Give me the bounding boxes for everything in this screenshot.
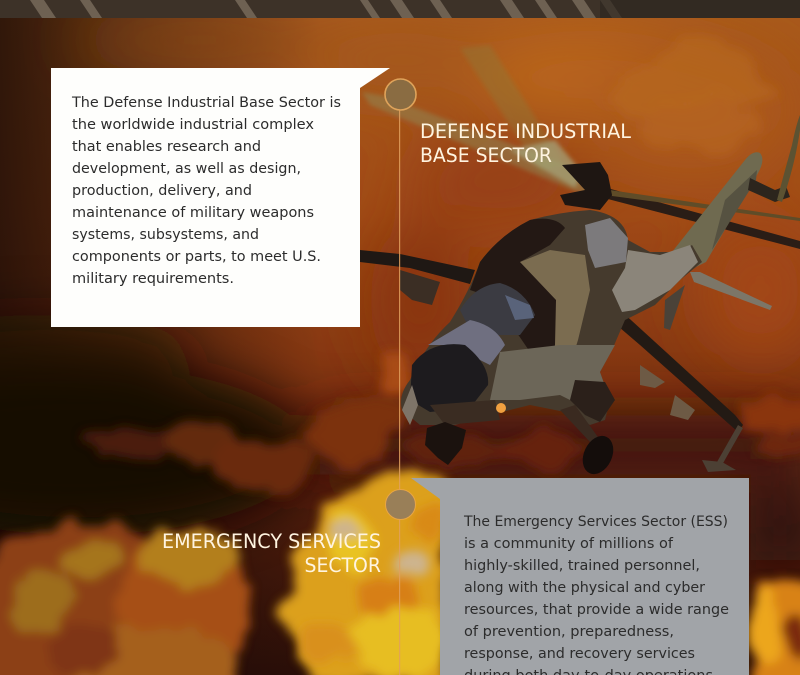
text: defense description: production, delivery, and (72, 183, 252, 199)
canopy (460, 283, 535, 335)
tail fin (690, 272, 772, 310)
heading: defense industrial base sector: BASE SECTOR (420, 144, 552, 167)
left explosion (0, 525, 250, 675)
rotor hub (560, 162, 612, 210)
dark brown clouds (85, 350, 800, 493)
text: defense description: the worldwide industrial complex (72, 117, 314, 133)
text: defense description: The Defense Industrial Base Sector is (71, 95, 341, 111)
right stub wing (605, 310, 743, 432)
top textured strip (0, 0, 800, 18)
fuselage (401, 210, 702, 425)
text: emergency description: of prevention, preparedness, (464, 624, 674, 640)
marker: defense sector (385, 79, 416, 110)
text: emergency description: along with the physical and cyber (464, 580, 705, 596)
panel: defense industrial base description (51, 68, 390, 327)
lower dark band (0, 315, 800, 560)
text: emergency description: response, and recovery services (464, 646, 695, 662)
text: defense description: that enables research and (72, 139, 261, 155)
panel: emergency services description (411, 478, 749, 675)
text: defense description: components or parts, to meet U.S. (72, 249, 321, 265)
right explosion (753, 580, 800, 675)
tail rotor (748, 178, 790, 202)
text: emergency description: highly-skilled, trained personnel, (464, 558, 700, 574)
text: defense description: maintenance of military weapons (72, 205, 314, 221)
grey engine (585, 218, 628, 268)
main rotor motion blur (362, 45, 600, 195)
marker: emergency sector (386, 490, 416, 520)
billowing cumulus (620, 40, 770, 150)
text: defense description: military requirements. (72, 271, 234, 287)
text: emergency description (463, 514, 729, 675)
left stub wing (360, 250, 475, 284)
text: defense description (71, 95, 341, 287)
heading: emergency services sector (162, 530, 381, 577)
text: defense description: development, as well as design, (72, 161, 301, 177)
left dark vignette (0, 18, 294, 564)
grey rear fuselage (612, 245, 698, 312)
text: emergency description: The Emergency Services Sector (ESS) (463, 514, 728, 530)
heading: defense industrial base sector (420, 120, 631, 167)
muzzle flash (496, 403, 506, 413)
lower body (490, 345, 615, 410)
tail boom (672, 152, 762, 270)
text: emergency description: is a community of millions of (464, 536, 674, 552)
heading: emergency services sector: EMERGENCY SERVICES (162, 530, 381, 553)
landing gear (425, 422, 466, 465)
exhaust dark (570, 380, 615, 422)
upper right bright clouds (70, 22, 800, 380)
text: emergency description: resources, that provide a wide range (464, 602, 729, 618)
rotor blades (600, 186, 800, 249)
text: defense description: systems, subsystems, and (72, 227, 259, 243)
heading: emergency services sector: SECTOR (304, 554, 381, 577)
tan body panel (520, 250, 590, 380)
heading: defense industrial base sector: DEFENSE INDUSTRIAL (420, 120, 631, 143)
helicopter illustration (360, 45, 800, 479)
nose and chin turret (410, 344, 488, 412)
timeline line (399, 108, 400, 675)
central yellow fireball (285, 472, 445, 675)
engine housing dark (470, 219, 565, 352)
